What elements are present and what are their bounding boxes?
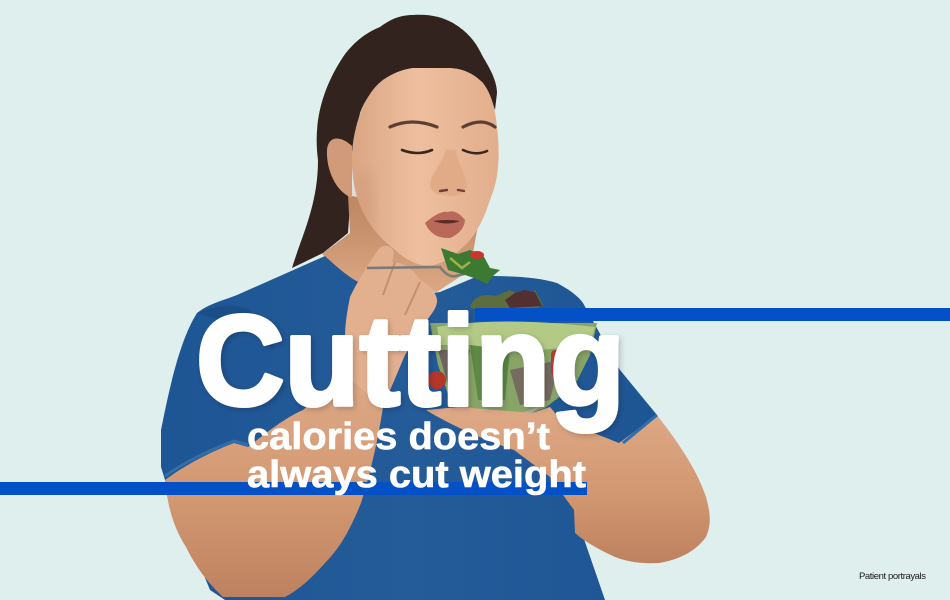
ear xyxy=(327,139,352,198)
eyes xyxy=(402,150,487,153)
shoulder seam shading xyxy=(197,306,275,350)
headline word: Cutting: Cutting xyxy=(196,290,625,433)
nose xyxy=(430,150,467,196)
subhead line 1: calories doesn’t xyxy=(247,416,550,458)
fork xyxy=(367,267,480,276)
eyebrows xyxy=(390,122,495,127)
tomato on fork xyxy=(470,251,484,259)
light lettuce xyxy=(437,322,595,352)
illustration: woman eating salad xyxy=(161,15,710,600)
tomato right xyxy=(551,350,561,376)
dark leaves xyxy=(438,350,470,395)
face xyxy=(352,68,499,266)
tomatoes xyxy=(428,371,446,389)
left arm xyxy=(165,377,383,597)
purple lettuce xyxy=(510,360,560,405)
salad bowl xyxy=(428,290,597,418)
bowl base xyxy=(462,406,540,418)
sleeve hem left xyxy=(165,441,248,476)
knuckle shading xyxy=(383,262,420,315)
dark lettuce top xyxy=(505,290,542,308)
leafy top xyxy=(470,290,543,312)
footnote: Patient portrayals xyxy=(859,571,926,582)
headline xyxy=(196,290,625,496)
neck xyxy=(322,195,478,292)
bottom blue bar xyxy=(0,482,587,495)
cheek shading xyxy=(352,171,376,239)
left hand xyxy=(345,246,437,407)
mouth xyxy=(425,211,465,238)
nostrils xyxy=(440,190,464,191)
green center xyxy=(470,345,510,400)
shirt body xyxy=(161,256,657,600)
bowl contents xyxy=(430,323,597,417)
ponytail and hair xyxy=(292,15,497,268)
subhead line 2: always cut weight xyxy=(247,454,586,496)
leaf highlight xyxy=(450,258,470,268)
sleeve hem right xyxy=(623,415,657,443)
right arm xyxy=(426,407,710,563)
top blue bar xyxy=(475,308,950,321)
salad on fork xyxy=(441,248,500,284)
